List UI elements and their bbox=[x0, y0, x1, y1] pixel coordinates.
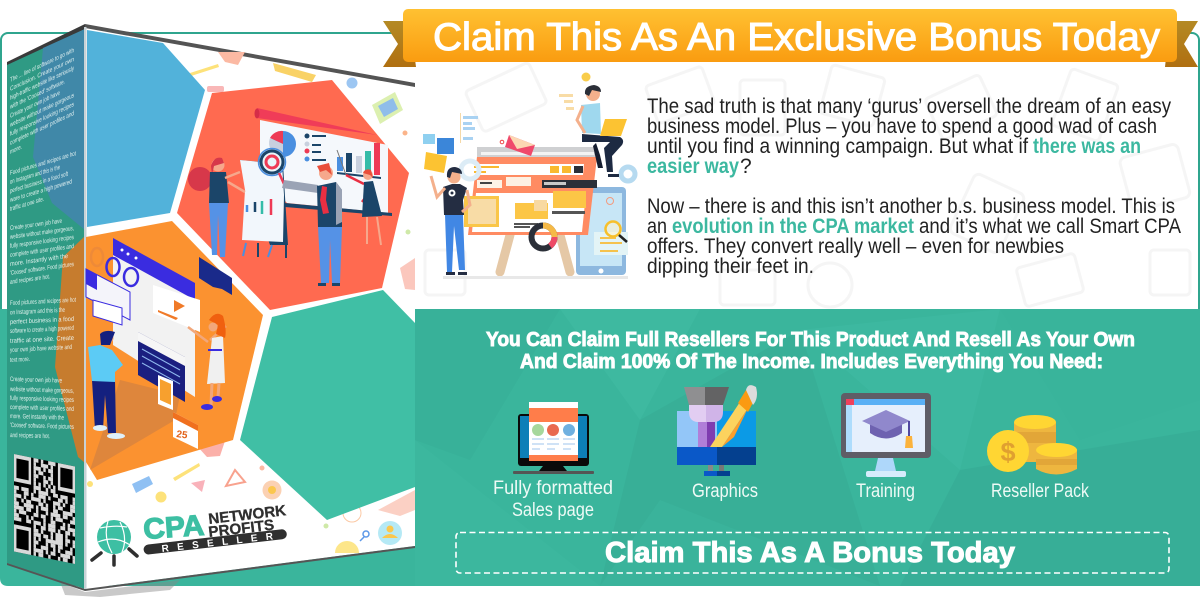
text block: intro paragraph two bbox=[647, 195, 1181, 278]
call to action box bbox=[456, 532, 1169, 573]
logo: CPA Network Profits Reseller bbox=[92, 502, 288, 565]
panel: white upper frame bbox=[1, 33, 1199, 323]
left face text: with the 'Coosed' software. bbox=[9, 78, 65, 111]
easel legs bbox=[500, 235, 570, 272]
confetti decorations bbox=[87, 52, 415, 553]
left face text: text more. bbox=[10, 356, 30, 364]
logo reseller bar bbox=[143, 529, 288, 557]
box front face bbox=[85, 27, 415, 589]
panel: teal lower section bbox=[0, 309, 1200, 586]
left face text: Create your own job have bbox=[10, 90, 60, 120]
icon: graphics monitor bbox=[677, 385, 757, 476]
ground line bbox=[443, 276, 628, 279]
left face text: The ... line of software to go with bbox=[10, 47, 74, 84]
logo CPA: CPA bbox=[142, 510, 205, 546]
text block: intro paragraph one: there was an bbox=[1033, 135, 1141, 158]
label: training: Training bbox=[856, 481, 915, 502]
icon: gold coins bbox=[987, 415, 1077, 474]
left face text: fully responsive looking recipes bbox=[10, 101, 74, 138]
left face orange overlay bbox=[55, 236, 85, 463]
left face text bbox=[9, 47, 76, 441]
left face text: Conclusion. Create your own bbox=[10, 56, 74, 93]
call to action box: Claim This As A Bonus Today bbox=[605, 537, 1015, 569]
box bottom edge bbox=[7, 546, 415, 591]
label: fully formatted sales page: Fully formatted bbox=[493, 478, 613, 499]
ribbon banner bbox=[383, 9, 1198, 67]
left face text: your own job have website and bbox=[10, 344, 72, 354]
calendar bbox=[173, 412, 198, 449]
small card bbox=[86, 269, 130, 325]
box left face bbox=[7, 29, 85, 589]
left face text: fully responsive looking recipes bbox=[10, 234, 75, 250]
icon: sales page monitor bbox=[513, 402, 594, 474]
logo globe bbox=[92, 520, 137, 565]
left face text: traffic at one site. Create bbox=[10, 335, 74, 345]
left face blue overlay bbox=[33, 29, 85, 230]
text block: intro paragraph one: until you find a winning campaign. But what if bbox=[647, 135, 1028, 158]
whiteboard bbox=[254, 108, 392, 216]
flip chart bbox=[240, 160, 288, 258]
hexagon: blue bbox=[87, 30, 205, 227]
left face text: software to create a high powered bbox=[10, 325, 74, 335]
woman right bbox=[337, 150, 382, 245]
product box bbox=[7, 24, 415, 597]
left face text: Create your own job have bbox=[10, 376, 62, 385]
left face text: traffic at one site. bbox=[10, 196, 44, 213]
left face text: ware to create a high powered bbox=[9, 178, 72, 204]
text block: intro paragraph two: dipping their feet in. bbox=[647, 255, 814, 278]
logo network: NETWORK bbox=[208, 502, 287, 528]
box left top edge bbox=[7, 24, 85, 66]
left face text: complete with user profiles and bbox=[10, 404, 74, 413]
text block: intro paragraph two: an bbox=[647, 215, 667, 238]
donut chart bbox=[532, 226, 554, 248]
title: Claim This As An Exclusive Bonus Today bbox=[433, 16, 1161, 59]
hexagon: orange with web scene bbox=[86, 221, 263, 480]
left face text: on Instagram and this is the bbox=[10, 164, 60, 186]
heading: resellers: You Can Claim Full Resellers For This Product And Resell As Your Own bbox=[486, 329, 1135, 351]
left face text: on Instagram and this is the bbox=[10, 307, 65, 316]
left face text: high-traffic website like seriously bbox=[10, 65, 74, 102]
box shadow bbox=[60, 580, 180, 597]
man sitting with laptop bbox=[577, 72, 627, 177]
easel board bbox=[464, 147, 597, 235]
label: fully formatted sales page: Sales page bbox=[512, 500, 594, 521]
icon: gold coins: $ bbox=[1000, 437, 1016, 467]
label: graphics: Graphics bbox=[692, 481, 758, 502]
left face text: perfect business in a food soft bbox=[10, 171, 68, 195]
text block: intro paragraph one bbox=[647, 95, 1171, 178]
left face text: and recipes are hot. bbox=[10, 273, 50, 286]
left face text: Food pictures and recipes are hot bbox=[10, 297, 76, 307]
left face text: complete with user profiles and bbox=[10, 110, 74, 147]
QR code bbox=[14, 454, 75, 564]
left face text: fully responsive looking recipes bbox=[10, 395, 75, 404]
text block: intro paragraph two: offers. They convert really well – even for newbies bbox=[647, 235, 1064, 258]
presenter man bbox=[282, 163, 342, 286]
heading: resellers bbox=[486, 329, 1135, 373]
man from behind bbox=[88, 331, 125, 439]
illustration: easel and people bbox=[423, 72, 635, 279]
hexagon: red with presentation scene bbox=[177, 80, 409, 310]
label: fully formatted sales page bbox=[493, 478, 613, 521]
left face text: more. Get instantly with the bbox=[10, 413, 64, 422]
left face text: complete with user profiles and bbox=[10, 243, 74, 259]
left face text: 'Coosed' software. Food pictures bbox=[10, 422, 75, 431]
label: reseller pack: Reseller Pack bbox=[991, 481, 1089, 502]
text block: intro paragraph one: easier way bbox=[647, 155, 739, 178]
text block: intro paragraph two: evolution in the CPA market bbox=[672, 215, 914, 238]
magnifier ring bbox=[258, 148, 286, 184]
logo reseller bar: RESELLER bbox=[161, 531, 274, 555]
left face text: more. Instantly with the bbox=[10, 253, 68, 268]
box top edge bbox=[85, 24, 415, 87]
woman in dress bbox=[188, 314, 226, 410]
phone bbox=[158, 375, 173, 410]
box corner edge bbox=[84, 27, 86, 589]
envelope bbox=[500, 135, 535, 156]
left face text: 'Coosed' software. Food pictures bbox=[10, 261, 74, 277]
code window bbox=[138, 332, 185, 402]
icon: training monitor bbox=[841, 393, 931, 477]
left face text: perfect business in a food bbox=[10, 316, 74, 326]
logo profits: PROFITS bbox=[208, 517, 275, 541]
ribbon right tail bbox=[1165, 21, 1198, 67]
left face text: more. bbox=[10, 144, 22, 156]
left face text: Create your own job have bbox=[10, 218, 62, 232]
video window bbox=[153, 285, 200, 332]
browser window bbox=[113, 238, 195, 397]
progress rings bbox=[91, 248, 138, 286]
left face text: and recipes are hot. bbox=[10, 432, 50, 440]
floating cards bbox=[423, 134, 454, 173]
left face text: website without make gorgeous bbox=[9, 92, 74, 129]
ribbon body bbox=[403, 9, 1177, 62]
man standing bbox=[431, 167, 470, 275]
ribbon left tail bbox=[383, 21, 416, 67]
document lines and gears bbox=[460, 94, 635, 181]
woman left bbox=[188, 158, 245, 257]
phone bbox=[576, 187, 628, 275]
chat bubble bbox=[199, 257, 232, 295]
hexagon: teal bbox=[240, 290, 415, 520]
left face text: website without make gorgeous, bbox=[9, 386, 74, 395]
text block: intro paragraph one: ? bbox=[740, 155, 752, 178]
heading: resellers: And Claim 100% Of The Income. Includes Everything You Need: bbox=[520, 351, 1103, 373]
left face text: website without make gorgeous, bbox=[9, 225, 74, 241]
left face text: Food pictures and recipes are hot bbox=[10, 150, 76, 177]
calendar: 25 bbox=[176, 429, 189, 442]
